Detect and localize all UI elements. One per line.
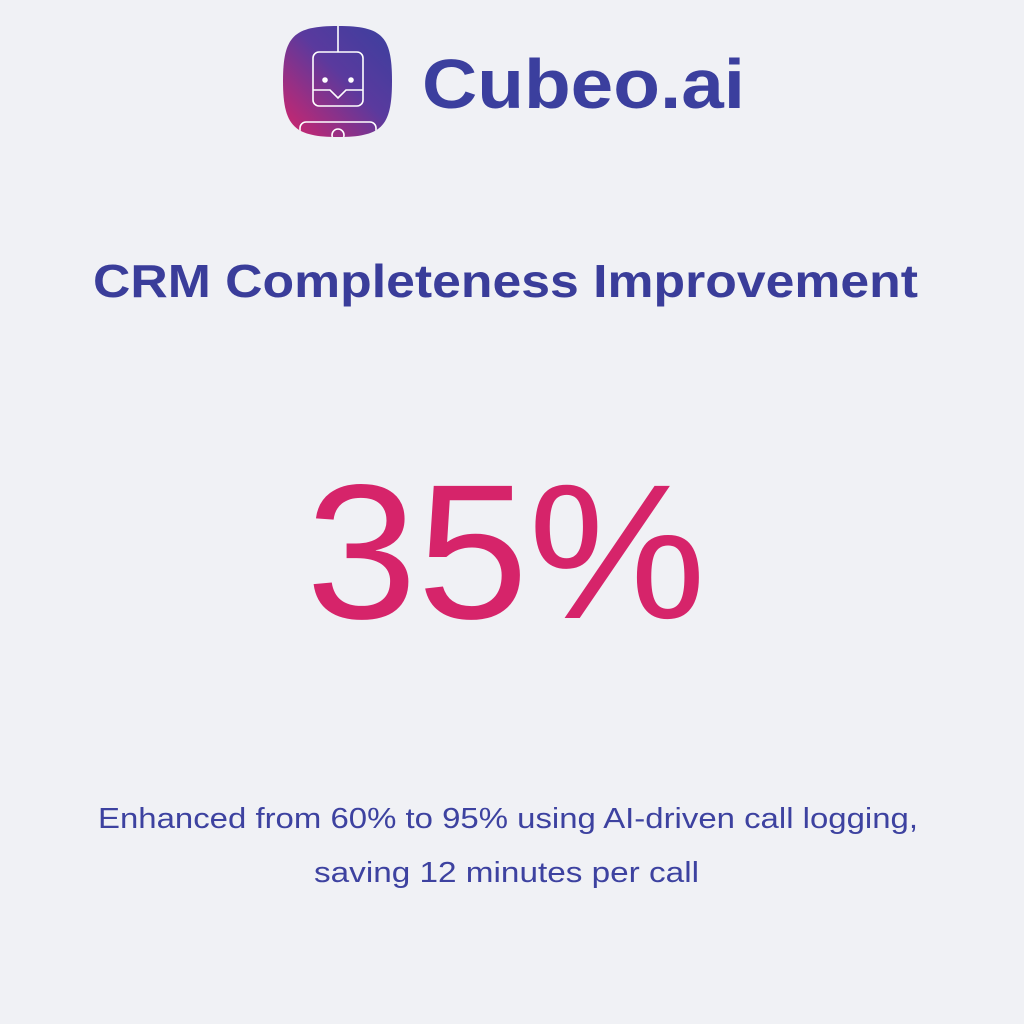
brand name: Cubeo.ai bbox=[422, 45, 745, 123]
icon: robot bbox=[283, 26, 392, 137]
description: saving 12 minutes per call bbox=[314, 857, 699, 889]
description: Enhanced from 60% to 95% using AI-driven call logging, bbox=[98, 803, 918, 835]
title: CRM Completeness Improvement bbox=[93, 255, 918, 307]
logo bbox=[283, 26, 745, 137]
description bbox=[98, 803, 918, 889]
